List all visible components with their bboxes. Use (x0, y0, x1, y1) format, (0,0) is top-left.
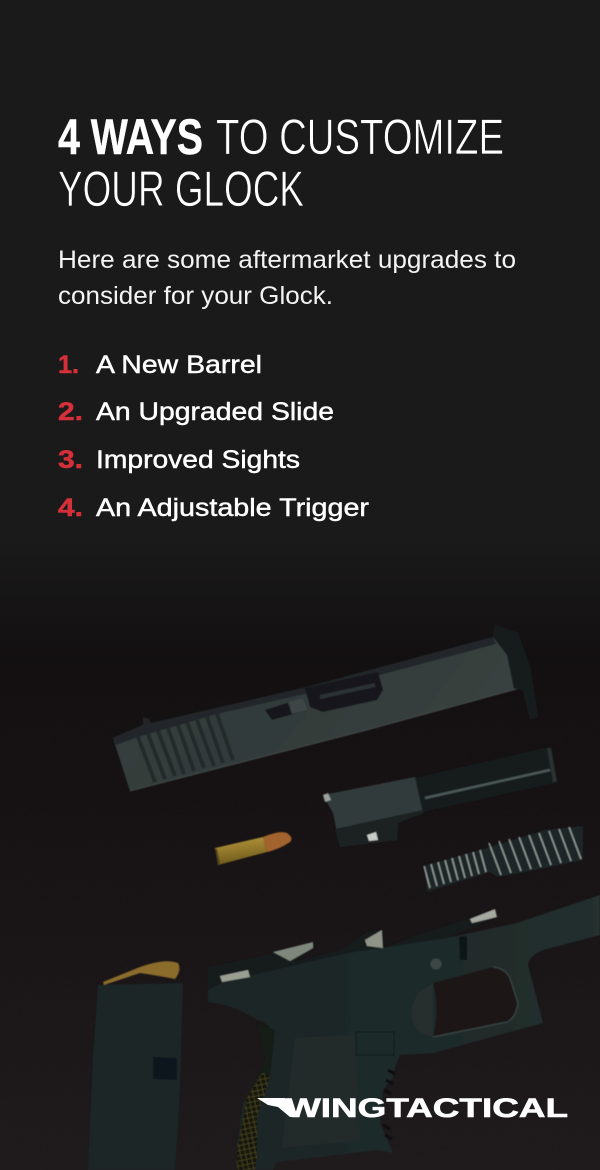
icon: top round in magazine (103, 961, 179, 985)
title: TO CUSTOMIZE (216, 109, 504, 165)
grip texture (282, 1035, 360, 1148)
list item 1: 1. (58, 351, 79, 379)
list item 4: An Adjustable Trigger (96, 494, 369, 522)
list item 1: A New Barrel (96, 351, 262, 379)
trigger (412, 983, 433, 1037)
icon: bullet (215, 832, 291, 865)
backstrap grooves (252, 1023, 275, 1095)
upper rails (208, 909, 497, 990)
front strap grooves (383, 1070, 395, 1139)
list item 4: 4. (58, 494, 83, 522)
intro text: Here are some aftermarket upgrades to (58, 246, 516, 274)
icon: pistol frame (208, 895, 600, 1170)
list item 2: An Upgraded Slide (96, 398, 334, 426)
logo wordmark: WINGTACTICAL (286, 1093, 568, 1123)
title: 4 WAYS (58, 109, 203, 165)
intro text: consider for your Glock. (58, 282, 333, 310)
icon: barrel (323, 747, 555, 847)
icon: pistol slide (113, 625, 538, 791)
trigger guard opening (433, 967, 518, 1037)
locking pin (430, 958, 442, 970)
title: YOUR GLOCK (58, 161, 304, 217)
list item 2: 2. (58, 398, 83, 426)
list item 3: 3. (58, 446, 83, 474)
logo: Wing Tactical (257, 1093, 568, 1123)
backstrap grid (237, 1072, 270, 1170)
icon: magazine (88, 961, 183, 1170)
intro text (58, 246, 516, 310)
numbered list (58, 351, 369, 522)
list item 3: Improved Sights (96, 446, 300, 474)
title (58, 109, 504, 217)
icon: logo wing (257, 1098, 300, 1117)
background (0, 620, 600, 874)
icon: recoil spring (424, 826, 583, 892)
